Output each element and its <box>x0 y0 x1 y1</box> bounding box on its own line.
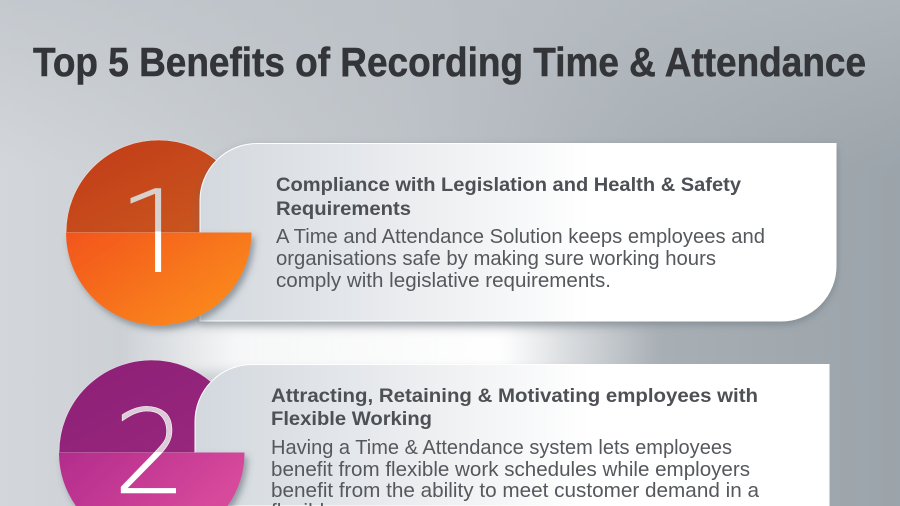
panel: benefit 2 <box>59 360 829 506</box>
circle 2 bottom half <box>59 452 244 506</box>
heading 1 <box>276 174 741 220</box>
heading 1: Compliance with Legislation and Health & Safety <box>276 174 741 196</box>
body text 2: Having a Time & Attendance system lets employees <box>271 436 732 459</box>
body text 2: benefit from flexible work schedules while employers <box>271 458 750 481</box>
number 1: 1 <box>117 165 195 308</box>
heading 1: Requirements <box>276 198 411 220</box>
body text 1: comply with legislative requirements. <box>276 269 611 292</box>
body text 1 <box>276 225 765 292</box>
body text 2: benefit from the ability to meet customer demand in a <box>271 479 760 502</box>
body text 2 <box>271 436 760 506</box>
heading 2 <box>271 385 758 430</box>
body text 1: organisations safe by making sure working hours <box>276 247 716 270</box>
body text 1: A Time and Attendance Solution keeps employees and <box>276 225 765 248</box>
circle 1 top half <box>66 140 251 232</box>
circle 2 top half <box>59 360 244 452</box>
circle 1 bottom half <box>66 232 252 325</box>
heading 2: Flexible Working <box>271 408 432 430</box>
heading 2: Attracting, Retaining & Motivating employees with <box>271 385 758 407</box>
panel: benefit 1 <box>66 140 836 325</box>
card 2 <box>195 364 829 506</box>
card 1 <box>200 144 836 321</box>
